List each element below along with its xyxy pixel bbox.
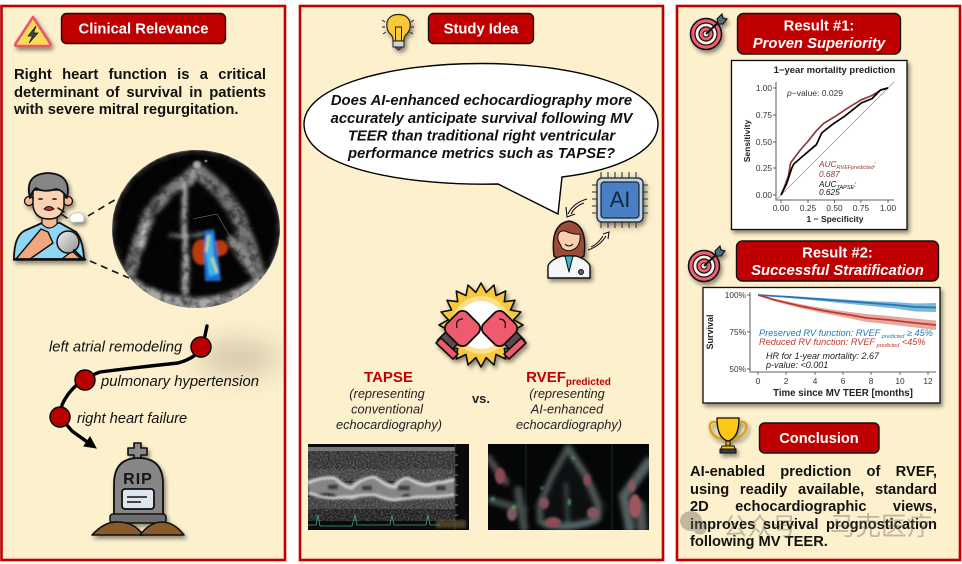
text: 1 − Specificity <box>807 214 864 224</box>
text: 0.25 <box>800 203 816 213</box>
text: 0.25 <box>756 163 772 173</box>
text: clinical relevance statement: determinant of survival in patients <box>14 85 266 101</box>
text: 100% <box>725 290 747 300</box>
text: TAPSE <box>837 185 854 191</box>
text: HR for 1-year mortality: 2.67 <box>766 351 880 361</box>
icon: target result 2 <box>688 246 725 282</box>
image: M-mode echocardiogram <box>308 444 469 530</box>
chart: Kaplan-Meier survival <box>703 288 940 403</box>
watermark: 公众号 <box>723 514 796 541</box>
text: : <box>854 179 856 189</box>
heading: result 1 <box>738 14 900 54</box>
heading: conclusion <box>760 423 879 453</box>
text: ≥ 45% <box>904 328 933 338</box>
text: conclusion statement: following MV TEER. <box>690 534 828 550</box>
panel: study idea <box>300 6 663 560</box>
node: pulmonary hypertension <box>75 370 259 390</box>
heading: conclusion: Conclusion <box>779 431 859 447</box>
label: TAPSE: echocardiography) <box>336 417 442 432</box>
text: conclusion statement: improves survival prognostication <box>690 517 937 533</box>
heading: result 2 <box>736 241 938 281</box>
label: TAPSE: (representing <box>349 386 425 401</box>
text: 0.625 <box>819 187 840 197</box>
text: conclusion statement: AI-enabled prediction of RVEF, <box>690 464 937 480</box>
text: 8 <box>869 376 874 386</box>
label: vs: vs. <box>472 391 490 406</box>
text: clinical relevance statement <box>14 67 266 118</box>
text: 0.75 <box>756 110 772 120</box>
watermark: 马克医疗 <box>830 513 932 541</box>
heading: study idea <box>428 14 534 44</box>
text: AUC <box>819 179 837 189</box>
icon: target result 1 <box>690 14 727 50</box>
text: p−value: 0.029 <box>786 88 843 98</box>
text: conclusion statement: 2D echocardiographic views, <box>690 499 937 515</box>
text: 10 <box>895 376 905 386</box>
text: <45% <box>899 337 926 347</box>
label: RVEF predicted <box>516 369 622 432</box>
pathway arrow <box>60 326 207 448</box>
icon: breathless patient <box>14 173 85 260</box>
text: 50% <box>729 364 747 374</box>
text: conclusion statement <box>690 464 937 550</box>
text: 1.00 <box>880 203 896 213</box>
heading: clinical relevance <box>62 14 226 44</box>
text: Time since MV TEER [months] <box>773 388 913 399</box>
text: RVEFpredicted <box>837 165 875 171</box>
text: 4 <box>813 376 818 386</box>
speech bubble: accurately anticipate survival following MV <box>331 111 634 127</box>
node: left atrial remodeling: left atrial remodeling <box>49 340 183 356</box>
heading: clinical relevance: Clinical Relevance <box>79 22 208 38</box>
icon: AI chip: AI <box>610 187 630 212</box>
icon: warning triangle <box>15 17 50 46</box>
label: RVEF predicted: echocardiography) <box>516 417 622 432</box>
text: AUC <box>819 159 837 169</box>
text: 0.50 <box>826 203 843 213</box>
label: TAPSE: conventional <box>351 402 424 416</box>
text: predicted <box>880 334 905 340</box>
heading: result 2: Successful Stratification <box>751 263 924 279</box>
text: 12 <box>923 376 933 386</box>
panel: results and conclusion <box>677 6 960 560</box>
text: Survival <box>705 314 715 350</box>
speech bubble: TEER than traditional right ventricular <box>348 128 616 144</box>
text: predicted <box>875 343 900 349</box>
speech bubble <box>304 64 658 214</box>
speech bubble: performance metrics such as TAPSE? <box>347 146 615 162</box>
text: 0.00 <box>756 190 772 200</box>
text: 6 <box>841 376 846 386</box>
label: RVEF predicted: AI-enhanced <box>530 402 604 416</box>
panel: clinical relevance <box>2 6 285 560</box>
icon: AI chip <box>592 172 648 228</box>
chart: ROC curve <box>732 60 907 230</box>
text: Preserved RV function: RVEF <box>759 328 880 338</box>
text: conclusion statement: using readily available, standard <box>690 482 937 498</box>
text: 1−year mortality prediction <box>774 65 896 76</box>
icon: boxing gloves <box>436 283 526 367</box>
text: : <box>874 159 876 169</box>
text: 0.687 <box>819 169 840 179</box>
text: 0 <box>756 376 761 386</box>
text: 0.00 <box>773 203 789 213</box>
heading: result 1: Proven Superiority <box>753 36 886 52</box>
icon: doctor <box>548 221 590 278</box>
echocardiogram circle <box>112 150 280 308</box>
heading: result 2: Result #2: <box>802 246 873 262</box>
icon: trophy <box>710 418 746 453</box>
label: RVEF predicted: predicted <box>566 377 611 388</box>
heading: study idea: Study Idea <box>444 22 519 38</box>
text: 1.00 <box>756 83 772 93</box>
text: Sensitivity <box>742 119 752 162</box>
icon: RIP tombstone <box>92 443 184 535</box>
text: 75% <box>729 327 747 337</box>
icon: RIP tombstone: RIP <box>123 471 153 488</box>
text: 0.75 <box>853 203 869 213</box>
text: 0.50 <box>756 137 772 147</box>
image: AI-enhanced echocardiogram <box>488 444 649 530</box>
node: left atrial remodeling <box>49 337 211 357</box>
heading: result 1: Result #1: <box>784 18 854 34</box>
node: pulmonary hypertension: pulmonary hypertension <box>100 374 259 390</box>
label: TAPSE <box>336 369 442 432</box>
label: RVEF predicted: RVEF <box>526 369 566 386</box>
speech bubble: Does AI-enhanced echocardiography more <box>331 93 632 109</box>
soft shadow behind the pathway <box>196 340 280 376</box>
label: RVEF predicted: (representing <box>529 386 605 401</box>
text: Reduced RV function: RVEF <box>759 337 875 347</box>
label: TAPSE: TAPSE <box>364 369 413 386</box>
text: clinical relevance statement: Right heart function is a critical <box>14 67 266 83</box>
node: right heart failure <box>50 407 187 427</box>
dashed callout lines <box>88 198 129 278</box>
text: 2 <box>784 376 789 386</box>
text: clinical relevance statement: with severe mitral regurgitation. <box>14 102 238 118</box>
arrows between doctor and AI <box>566 199 609 250</box>
text: p-value: <0.001 <box>765 360 828 370</box>
icon: light bulb <box>382 14 414 50</box>
node: right heart failure: right heart failure <box>77 411 187 427</box>
